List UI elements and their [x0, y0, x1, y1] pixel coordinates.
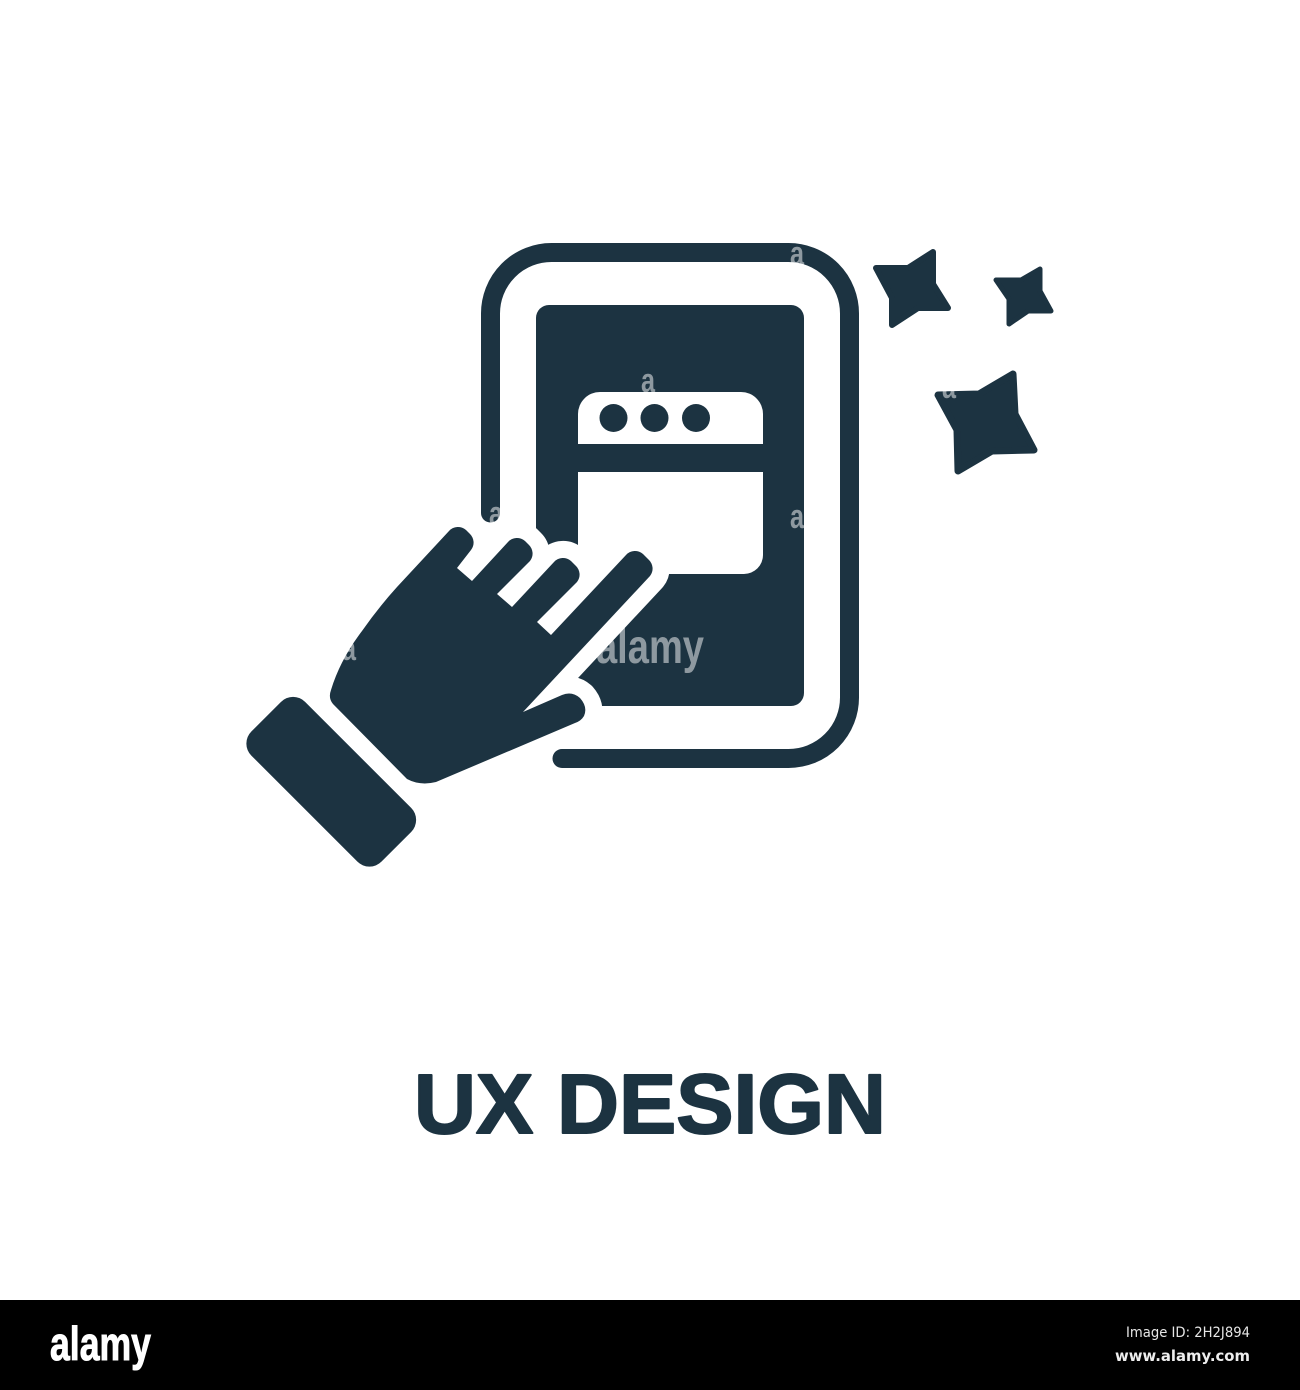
- icon: hand: [330, 527, 653, 783]
- title: UX DESIGN: [414, 1057, 886, 1151]
- icon: tablet screen: [536, 305, 804, 706]
- watermark: small marks: a: [342, 630, 357, 668]
- icon: star bottom: [938, 374, 1034, 471]
- icon: sparkle stars: [876, 252, 1051, 471]
- watermark: center logo: alamy: [596, 621, 704, 674]
- footer website: www.alamy.com: [1115, 1347, 1250, 1365]
- icon: tablet with window and pointing hand: [239, 252, 850, 874]
- watermark: small marks: [342, 235, 957, 668]
- icon: star top left: [876, 252, 948, 325]
- watermark: small marks: a: [489, 495, 504, 533]
- icon: tablet outer frame: [490, 252, 850, 759]
- footer image id: Image ID: 2H2J894: [1126, 1325, 1250, 1341]
- icon: star top right: [996, 269, 1051, 324]
- watermark: small marks: a: [790, 498, 805, 536]
- watermark: small marks: a: [942, 368, 957, 406]
- watermark: small marks: a: [790, 235, 805, 273]
- footer logo: alamy: [50, 1317, 151, 1370]
- icon: shirt cuff: [239, 690, 423, 874]
- footer bar: [0, 1300, 1300, 1390]
- icon: browser window: [578, 392, 763, 574]
- watermark: small marks: a: [641, 362, 656, 400]
